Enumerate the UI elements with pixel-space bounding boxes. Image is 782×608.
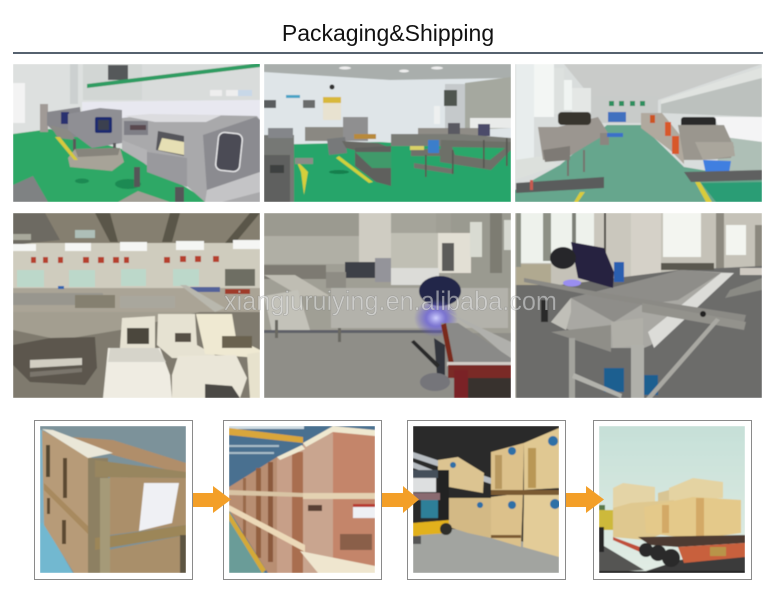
left cabinets bbox=[264, 135, 294, 202]
packing frame 2: crates in warehouse bbox=[224, 420, 382, 580]
arrow 2 bbox=[382, 486, 419, 513]
washer machine body bbox=[264, 265, 326, 279]
photo: long production hall bbox=[515, 64, 762, 202]
photo: factory hall with wrapped machines bbox=[13, 213, 260, 398]
trailer bbox=[613, 537, 640, 552]
wrapped machines bbox=[103, 314, 260, 398]
big machine bbox=[122, 115, 260, 202]
pipes bbox=[524, 278, 746, 322]
steel trough bbox=[551, 270, 734, 348]
steel tables bbox=[327, 134, 511, 186]
blue crate bbox=[703, 160, 731, 174]
photo: welder at steel trough bbox=[515, 213, 762, 398]
packing frame 1: crate close-up bbox=[34, 420, 192, 580]
title: Packaging&Shipping bbox=[282, 20, 494, 46]
photo: dicing machines on green floor bbox=[13, 64, 260, 202]
roller conveyors bbox=[516, 177, 604, 193]
middle machine bbox=[68, 108, 122, 148]
green floor bbox=[264, 142, 511, 202]
packing frame 4: crates on trailer bbox=[594, 420, 752, 580]
forklift bbox=[438, 470, 449, 523]
welder bbox=[571, 242, 614, 288]
concrete floor bbox=[264, 333, 511, 398]
arrow 1 bbox=[193, 486, 231, 513]
photo: workshop with steel tables bbox=[264, 64, 511, 202]
left machine line bbox=[538, 117, 608, 160]
red work table bbox=[448, 312, 511, 360]
pipe stand and pump bbox=[551, 325, 611, 352]
photo: welding at washing line bbox=[264, 213, 511, 398]
watermark: xiangjuruiying.en.alibaba.com bbox=[224, 286, 557, 316]
concrete floor bbox=[13, 312, 260, 398]
green floor bbox=[515, 125, 762, 202]
red slogan marks bbox=[31, 256, 219, 263]
grey floor bbox=[516, 266, 762, 398]
green floor bbox=[13, 129, 210, 202]
welder glow bbox=[419, 276, 461, 306]
right machine line bbox=[641, 113, 684, 164]
steel machine bbox=[13, 337, 97, 385]
packing frame 3: forklift and stacked crates bbox=[408, 420, 566, 580]
back machines bbox=[305, 127, 345, 141]
machine window bbox=[215, 132, 243, 172]
high windows bbox=[13, 240, 260, 251]
white booth bbox=[438, 233, 471, 273]
arrow 3 bbox=[566, 486, 604, 513]
machine line bbox=[13, 288, 260, 312]
lower windows bbox=[17, 269, 199, 287]
far machine bbox=[47, 107, 83, 137]
